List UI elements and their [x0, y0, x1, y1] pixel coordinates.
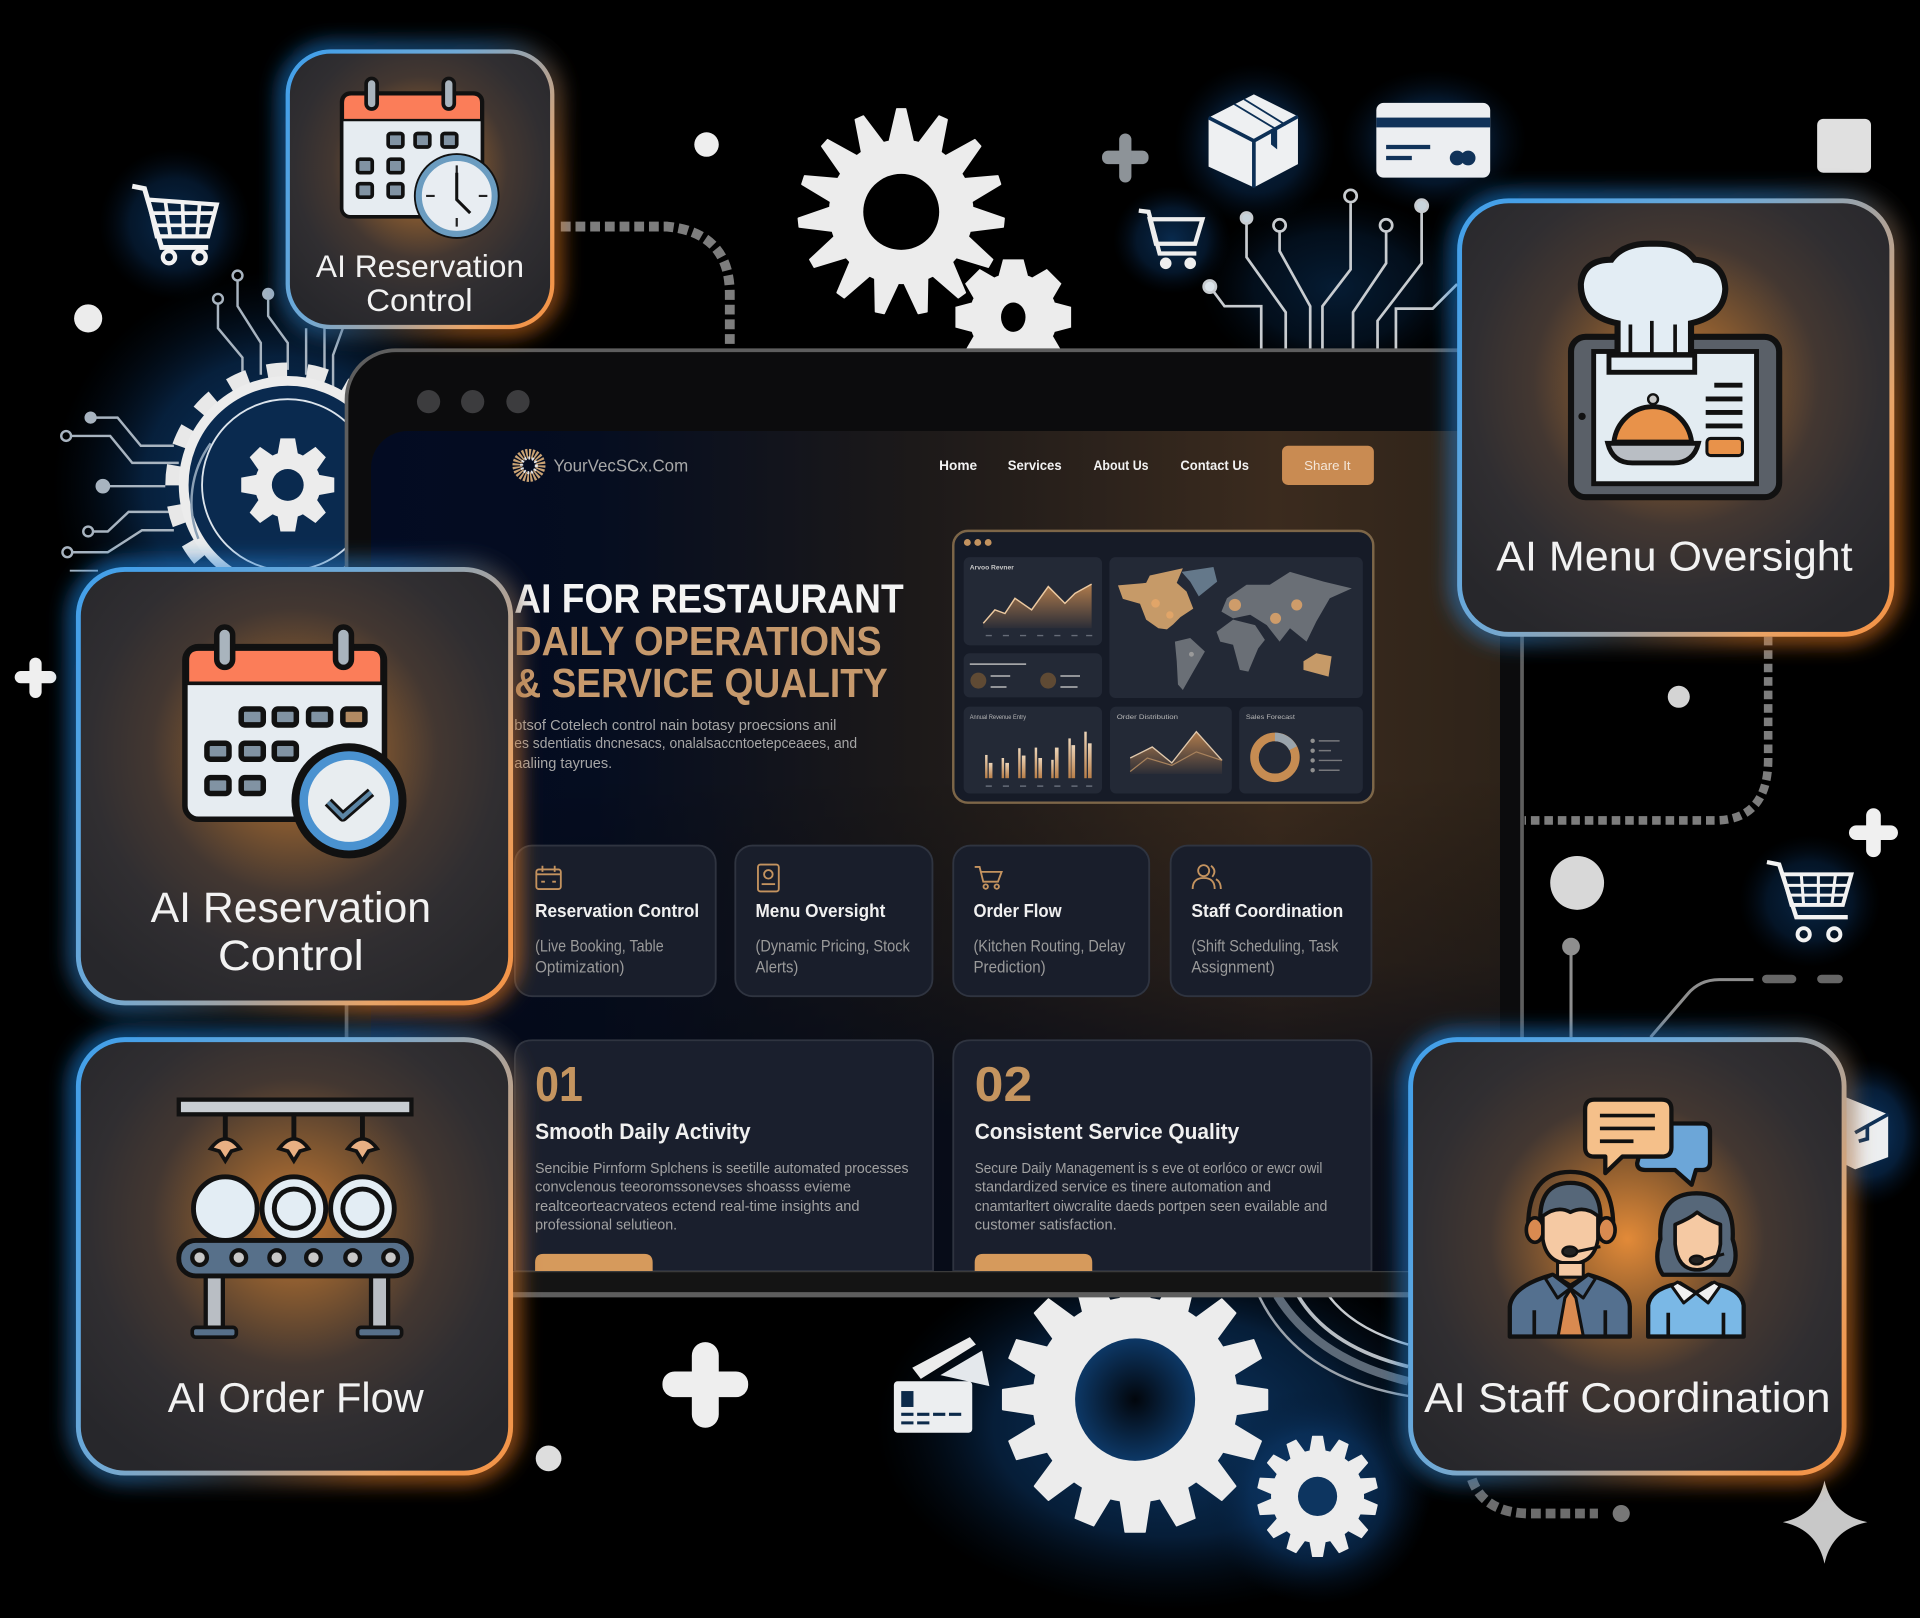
icon: plus top — [1102, 134, 1149, 182]
website screen — [371, 431, 1500, 1288]
line chart — [1117, 714, 1222, 774]
panel: analytics dashboard — [953, 531, 1373, 803]
speech bubble blue — [1637, 1124, 1710, 1185]
icon: kitchen conveyor with plates — [179, 1100, 411, 1337]
area chart — [970, 564, 1092, 636]
panel: AI menu oversight card — [1460, 201, 1892, 634]
icon: shopping cart left — [132, 186, 217, 263]
feature card: reservation control: (Live Booking, Table — [535, 936, 664, 955]
feature card: reservation control: Optimization) — [535, 957, 624, 976]
world map — [1118, 567, 1352, 690]
navigation: Contact Us — [1180, 457, 1249, 473]
content card: smooth daily activity: realtceorteacrvateos ectend real-time insights and — [535, 1199, 860, 1215]
window controls — [417, 390, 530, 413]
headline — [514, 575, 904, 706]
panel: AI order flow card — [78, 1040, 511, 1473]
panel: AI reservation control card: Control — [218, 932, 364, 980]
content card: consistent service quality: customer satisfaction. — [975, 1217, 1117, 1233]
panel: AI order flow card: AI Order Flow — [168, 1374, 425, 1421]
circuit lines left of gear — [61, 271, 343, 571]
navigation: About Us — [1093, 457, 1149, 473]
panel: AI reservation control small card: Control — [366, 282, 473, 318]
gear: large top gear — [798, 109, 1005, 315]
content card: smooth daily activity: convclenous teeoromssonevses shoasss evieme — [535, 1179, 851, 1195]
navigation: Services — [1008, 457, 1062, 473]
icon: bottom payment card — [894, 1337, 989, 1433]
gear: large bottom gear — [1003, 1267, 1267, 1532]
feature card: order flow: (Kitchen Routing, Delay — [973, 936, 1126, 955]
headline: AI FOR RESTAURANT — [514, 575, 904, 621]
icon: square top right — [1817, 119, 1871, 173]
content card: consistent service quality: standardized service es tinere automation and — [975, 1179, 1271, 1195]
feature card: order flow: Order Flow — [973, 900, 1062, 921]
icon: large dot right — [1550, 856, 1604, 910]
feature card: staff coordination: Staff Coordination — [1191, 900, 1343, 921]
speech bubble orange — [1585, 1100, 1671, 1173]
icon: two staff members with speech bubbles — [1510, 1100, 1744, 1337]
headline: & SERVICE QUALITY — [514, 660, 888, 706]
headline: DAILY OPERATIONS — [514, 618, 882, 664]
feature card: staff coordination: Assignment) — [1191, 957, 1275, 976]
content card: consistent service quality — [953, 1040, 1371, 1271]
bar chart: Annual Revenue Entry — [970, 714, 1027, 721]
gear: small top gear — [954, 258, 1072, 376]
intro copy: aaliing tayrues. — [514, 756, 612, 772]
panel: AI menu oversight card: AI Menu Oversight — [1496, 533, 1853, 580]
feature card: order flow — [953, 846, 1149, 996]
icon: white dot top — [694, 132, 719, 157]
feature card: staff coordination: (Shift Scheduling, Task — [1191, 936, 1339, 955]
site logo — [517, 454, 688, 477]
icon: large plus bottom — [662, 1342, 748, 1428]
area chart: Arvoo Revner — [970, 564, 1015, 571]
circuit lines top — [1204, 190, 1457, 350]
content card: smooth daily activity: professional selutieon. — [535, 1217, 677, 1233]
icon: calendar with clock — [342, 78, 500, 239]
feature card: staff coordination — [1171, 846, 1371, 996]
icon: menu tablet outline — [758, 865, 779, 891]
panel: AI reservation control card — [78, 569, 511, 1003]
icon: dot bottom — [536, 1446, 561, 1471]
icon: shopping cart top — [1139, 211, 1202, 267]
content card: smooth daily activity: Smooth Daily Activity — [535, 1119, 751, 1144]
site logo: YourVecSCx.Com — [553, 455, 688, 475]
content card: consistent service quality: Secure Daily Management is s eve ot eorlóco or ewcr owil — [975, 1161, 1322, 1177]
donut chart: Sales Forecast — [1246, 714, 1295, 721]
feature card: menu oversight: Menu Oversight — [756, 900, 885, 921]
icon: chef hat and tablet menu — [1571, 244, 1779, 497]
panel: AI staff coordination card — [1411, 1040, 1844, 1473]
icon: plus right — [1849, 808, 1898, 857]
icon: people outline — [1193, 865, 1221, 889]
intro copy: es sdentiatis dncnesacs, onalalsaccntoetepceaees, and — [514, 736, 857, 752]
monitor bottom bezel — [371, 1271, 1522, 1294]
nav button — [1282, 446, 1374, 485]
man with headset — [1510, 1172, 1630, 1337]
icon: calendar with check — [185, 627, 407, 858]
icon: four-point star — [1783, 1480, 1867, 1564]
icon: dot bottom right — [1613, 1505, 1630, 1522]
icon: dot right — [1668, 686, 1690, 708]
stats tiles — [970, 664, 1080, 689]
content card: consistent service quality: Consistent Service Quality — [975, 1119, 1240, 1144]
icon: shopping cart right — [1767, 862, 1851, 940]
navigation — [939, 457, 1249, 473]
feature card: menu oversight: (Dynamic Pricing, Stock — [756, 936, 910, 955]
panel: AI reservation control small card: AI Reservation — [316, 248, 524, 284]
feature card: reservation control: Reservation Control — [535, 900, 699, 921]
panel: AI reservation control card: AI Reservation — [151, 884, 431, 932]
connector: dashed bottom right — [1472, 1479, 1598, 1514]
panel: monitor — [347, 350, 1522, 1296]
gear: small bottom gear — [1257, 1436, 1378, 1556]
icon: credit card top — [1376, 103, 1490, 178]
content card: smooth daily activity: Sencibie Pirnform Splchens is seetille automated processes — [535, 1161, 909, 1177]
intro copy — [514, 718, 857, 772]
icon: package box behind staff card — [1843, 1096, 1888, 1169]
content card: smooth daily activity: 01 — [535, 1058, 583, 1112]
icon: cart outline — [975, 867, 1002, 889]
donut chart — [1246, 714, 1342, 778]
connector: dashed right — [1524, 637, 1768, 820]
content card: consistent service quality: cnamtarltert oiwcralite daeds portpen seen evailable and — [975, 1199, 1327, 1215]
icon: white dot left — [74, 304, 102, 332]
panel: AI staff coordination card: AI Staff Coordination — [1424, 1374, 1831, 1421]
icon: plus left — [15, 658, 56, 698]
intro copy: btsof Cotelech control nain botasy proecsions anil — [514, 718, 836, 734]
feature card: reservation control — [515, 846, 716, 996]
arcs bottom right — [1259, 1296, 1408, 1396]
content card: smooth daily activity — [515, 1040, 933, 1271]
icon: calendar outline — [536, 866, 561, 889]
gear: left circuit gear — [174, 371, 402, 599]
connector: dashed top-left — [561, 227, 730, 350]
feature card: menu oversight — [735, 846, 932, 996]
bar chart — [970, 714, 1092, 786]
icon: package box top — [1209, 94, 1298, 187]
content card: consistent service quality: 02 — [975, 1058, 1032, 1112]
panel: AI reservation control small card — [288, 51, 552, 327]
woman with headset — [1648, 1193, 1744, 1337]
feature card: menu oversight: Alerts) — [756, 957, 798, 976]
line chart: Order Distribution — [1117, 714, 1178, 721]
feature card: order flow: Prediction) — [973, 957, 1046, 976]
nav button: Share It — [1304, 458, 1351, 473]
circuit right of monitor — [1564, 939, 1843, 1037]
navigation: Home — [939, 457, 977, 473]
